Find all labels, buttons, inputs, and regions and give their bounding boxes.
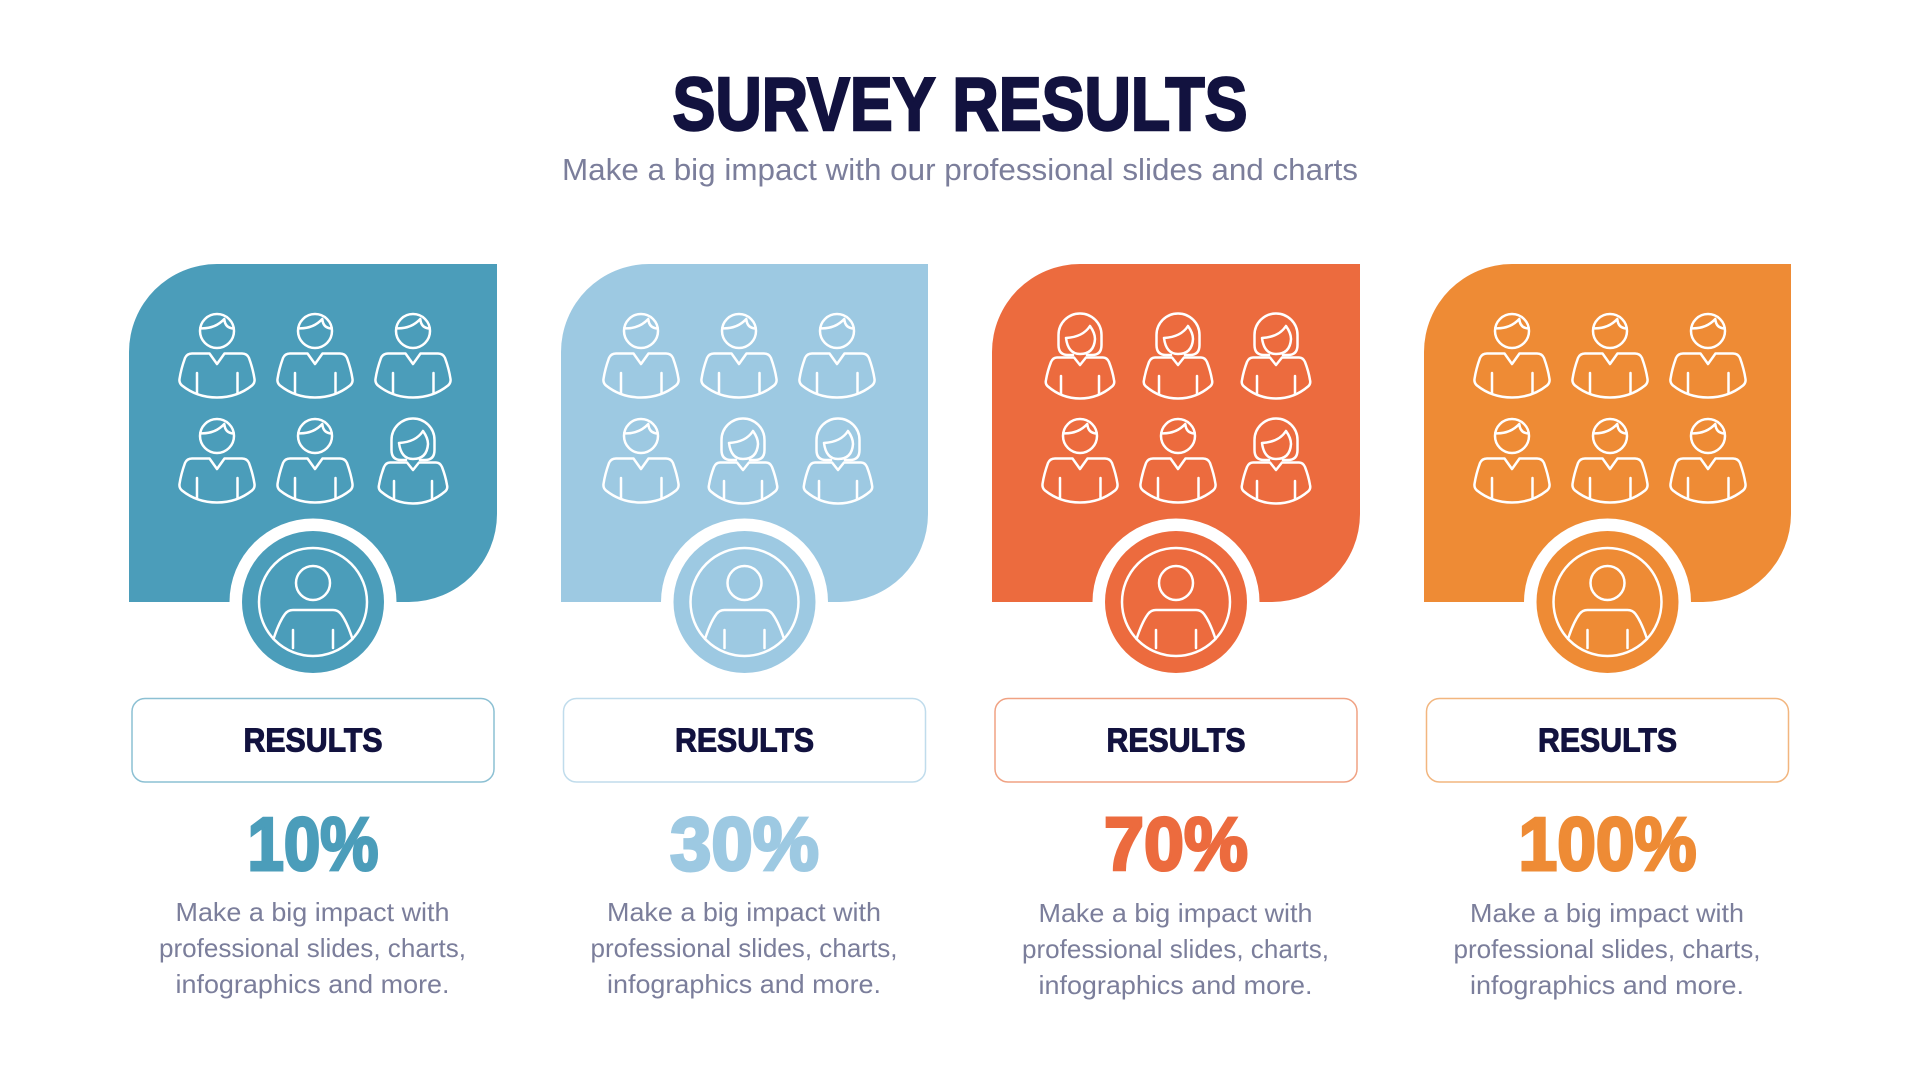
- description: professional slides, charts,: [1454, 934, 1760, 964]
- description: [590, 897, 898, 999]
- label box: RESULTS: [1538, 722, 1677, 758]
- description: [159, 897, 466, 999]
- label box: RESULTS: [1106, 722, 1246, 758]
- description: infographics and more.: [176, 969, 450, 999]
- description: Make a big impact with: [1470, 898, 1744, 928]
- description: Make a big impact with: [176, 897, 450, 927]
- panel: results card 1 (10%): [129, 264, 497, 999]
- percentage: 70%: [1104, 802, 1248, 886]
- title: SURVEY RESULTS: [672, 62, 1248, 146]
- label box: [564, 698, 926, 782]
- icon group: six people, all men: [1474, 314, 1746, 502]
- description: Make a big impact with: [607, 897, 881, 927]
- panel: results card 4 (100%): [1424, 264, 1791, 1000]
- subtitle: Make a big impact with our professional slides and charts: [562, 152, 1358, 187]
- icon: person badge: [1092, 518, 1260, 686]
- description: Make a big impact with: [1038, 898, 1312, 928]
- icon group: six people, five men one woman: [179, 314, 451, 504]
- label box: RESULTS: [244, 722, 382, 758]
- card shape: [992, 264, 1360, 602]
- percentage: 10%: [248, 802, 378, 886]
- description: professional slides, charts,: [590, 933, 898, 963]
- icon group: six people, two men four women: [1042, 314, 1310, 504]
- card shape: [129, 264, 497, 602]
- icon group: six people, four men two women: [603, 314, 875, 504]
- description: professional slides, charts,: [159, 933, 466, 963]
- panel: results card 2 (30%): [561, 264, 928, 999]
- card shape: [561, 264, 928, 602]
- card shape: [1424, 264, 1791, 602]
- panel: results card 3 (70%): [992, 264, 1360, 1000]
- label box: [132, 698, 494, 782]
- label box: [1426, 698, 1788, 782]
- description: professional slides, charts,: [1022, 934, 1329, 964]
- icon: person badge: [661, 518, 828, 686]
- icon: person badge: [230, 518, 396, 686]
- description: infographics and more.: [1470, 970, 1744, 1000]
- label box: RESULTS: [675, 722, 814, 758]
- percentage: 100%: [1518, 802, 1696, 886]
- label box: [995, 698, 1357, 782]
- percentage: 30%: [670, 802, 819, 886]
- description: [1022, 898, 1329, 1000]
- description: infographics and more.: [607, 969, 881, 999]
- description: infographics and more.: [1038, 970, 1312, 1000]
- icon: person badge: [1524, 518, 1691, 686]
- description: [1454, 898, 1760, 1000]
